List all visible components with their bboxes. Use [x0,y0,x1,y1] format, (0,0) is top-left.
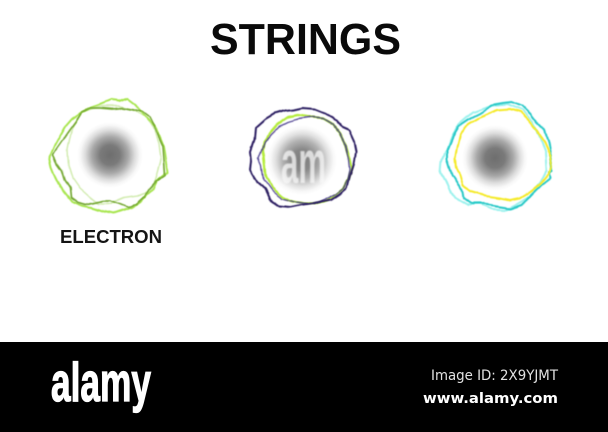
watermark letters: am [281,129,326,196]
string: indigo outer [251,108,356,208]
string: indigo inner [259,117,350,205]
electron string: dark [53,108,165,208]
image id: Image ID: 2X9YJMT [431,368,558,384]
second particle core [267,125,337,195]
logo: alamy: alamy [51,351,151,413]
watermark footer [0,342,608,432]
label: electron: ELECTRON [60,227,162,247]
diagram: electron [50,98,168,247]
diagram: second particle [251,108,356,208]
third particle core [462,125,528,191]
diagram: third particle [441,102,552,210]
electron string: bright outer [50,98,168,214]
title: STRINGS [210,15,401,64]
string: lime [263,115,352,204]
string: yellow [455,109,552,200]
website: www.alamy.com [423,391,558,407]
footer band [0,342,608,432]
string: pale cyan [441,104,546,210]
electron string: pale [67,106,161,204]
electron core [77,122,143,188]
string: teal [447,102,552,208]
